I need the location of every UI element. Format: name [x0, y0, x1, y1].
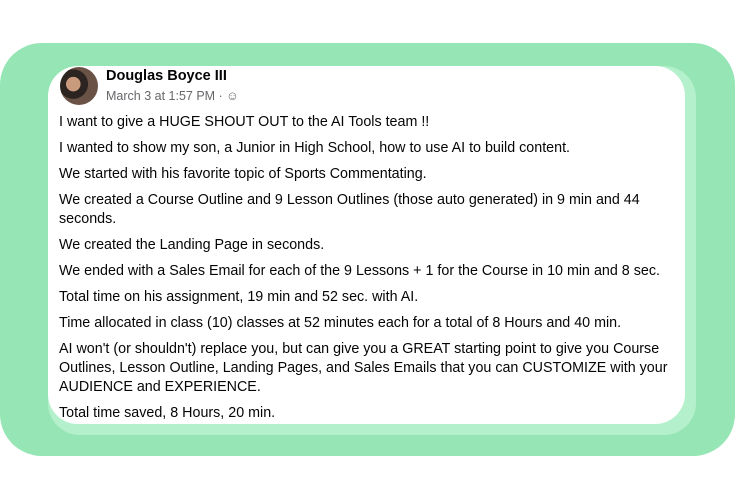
- post text: I wanted to show my son, a Junior in High School, how to use AI to build content.: [59, 140, 570, 156]
- post text: We created the Landing Page in seconds.: [59, 237, 324, 253]
- post text: [59, 114, 668, 421]
- post text: We ended with a Sales Email for each of the 9 Lessons + 1 for the Course in 10 min and 8 sec.: [59, 263, 660, 279]
- post text: Total time on his assignment, 19 min and 52 sec. with AI.: [59, 289, 418, 305]
- post text: We created a Course Outline and 9 Lesson Outlines (those auto generated) in 9 min and 44 seconds.: [59, 192, 640, 227]
- post date: March 3 at 1:57 PM · ☺: [106, 89, 239, 103]
- post text: Time allocated in class (10) classes at 52 minutes each for a total of 8 Hours and 40 min.: [59, 315, 621, 331]
- post text: We started with his favorite topic of Sports Commentating.: [59, 166, 427, 182]
- post text: AI won't (or shouldn't) replace you, but can give you a GREAT starting point to give you Course Outlines, Lesson Outline, Landing Pages, and Sales Emails that you can CUSTOMIZE with your AUDIENCE and EXPERIENCE.: [59, 341, 667, 395]
- light green layer: [48, 66, 696, 435]
- post card: [48, 66, 685, 424]
- author name: Douglas Boyce III: [106, 68, 227, 84]
- post text: Total time saved, 8 Hours, 20 min.: [59, 405, 275, 421]
- post text: I want to give a HUGE SHOUT OUT to the AI Tools team !!: [59, 114, 429, 130]
- icon: avatar: [60, 67, 98, 105]
